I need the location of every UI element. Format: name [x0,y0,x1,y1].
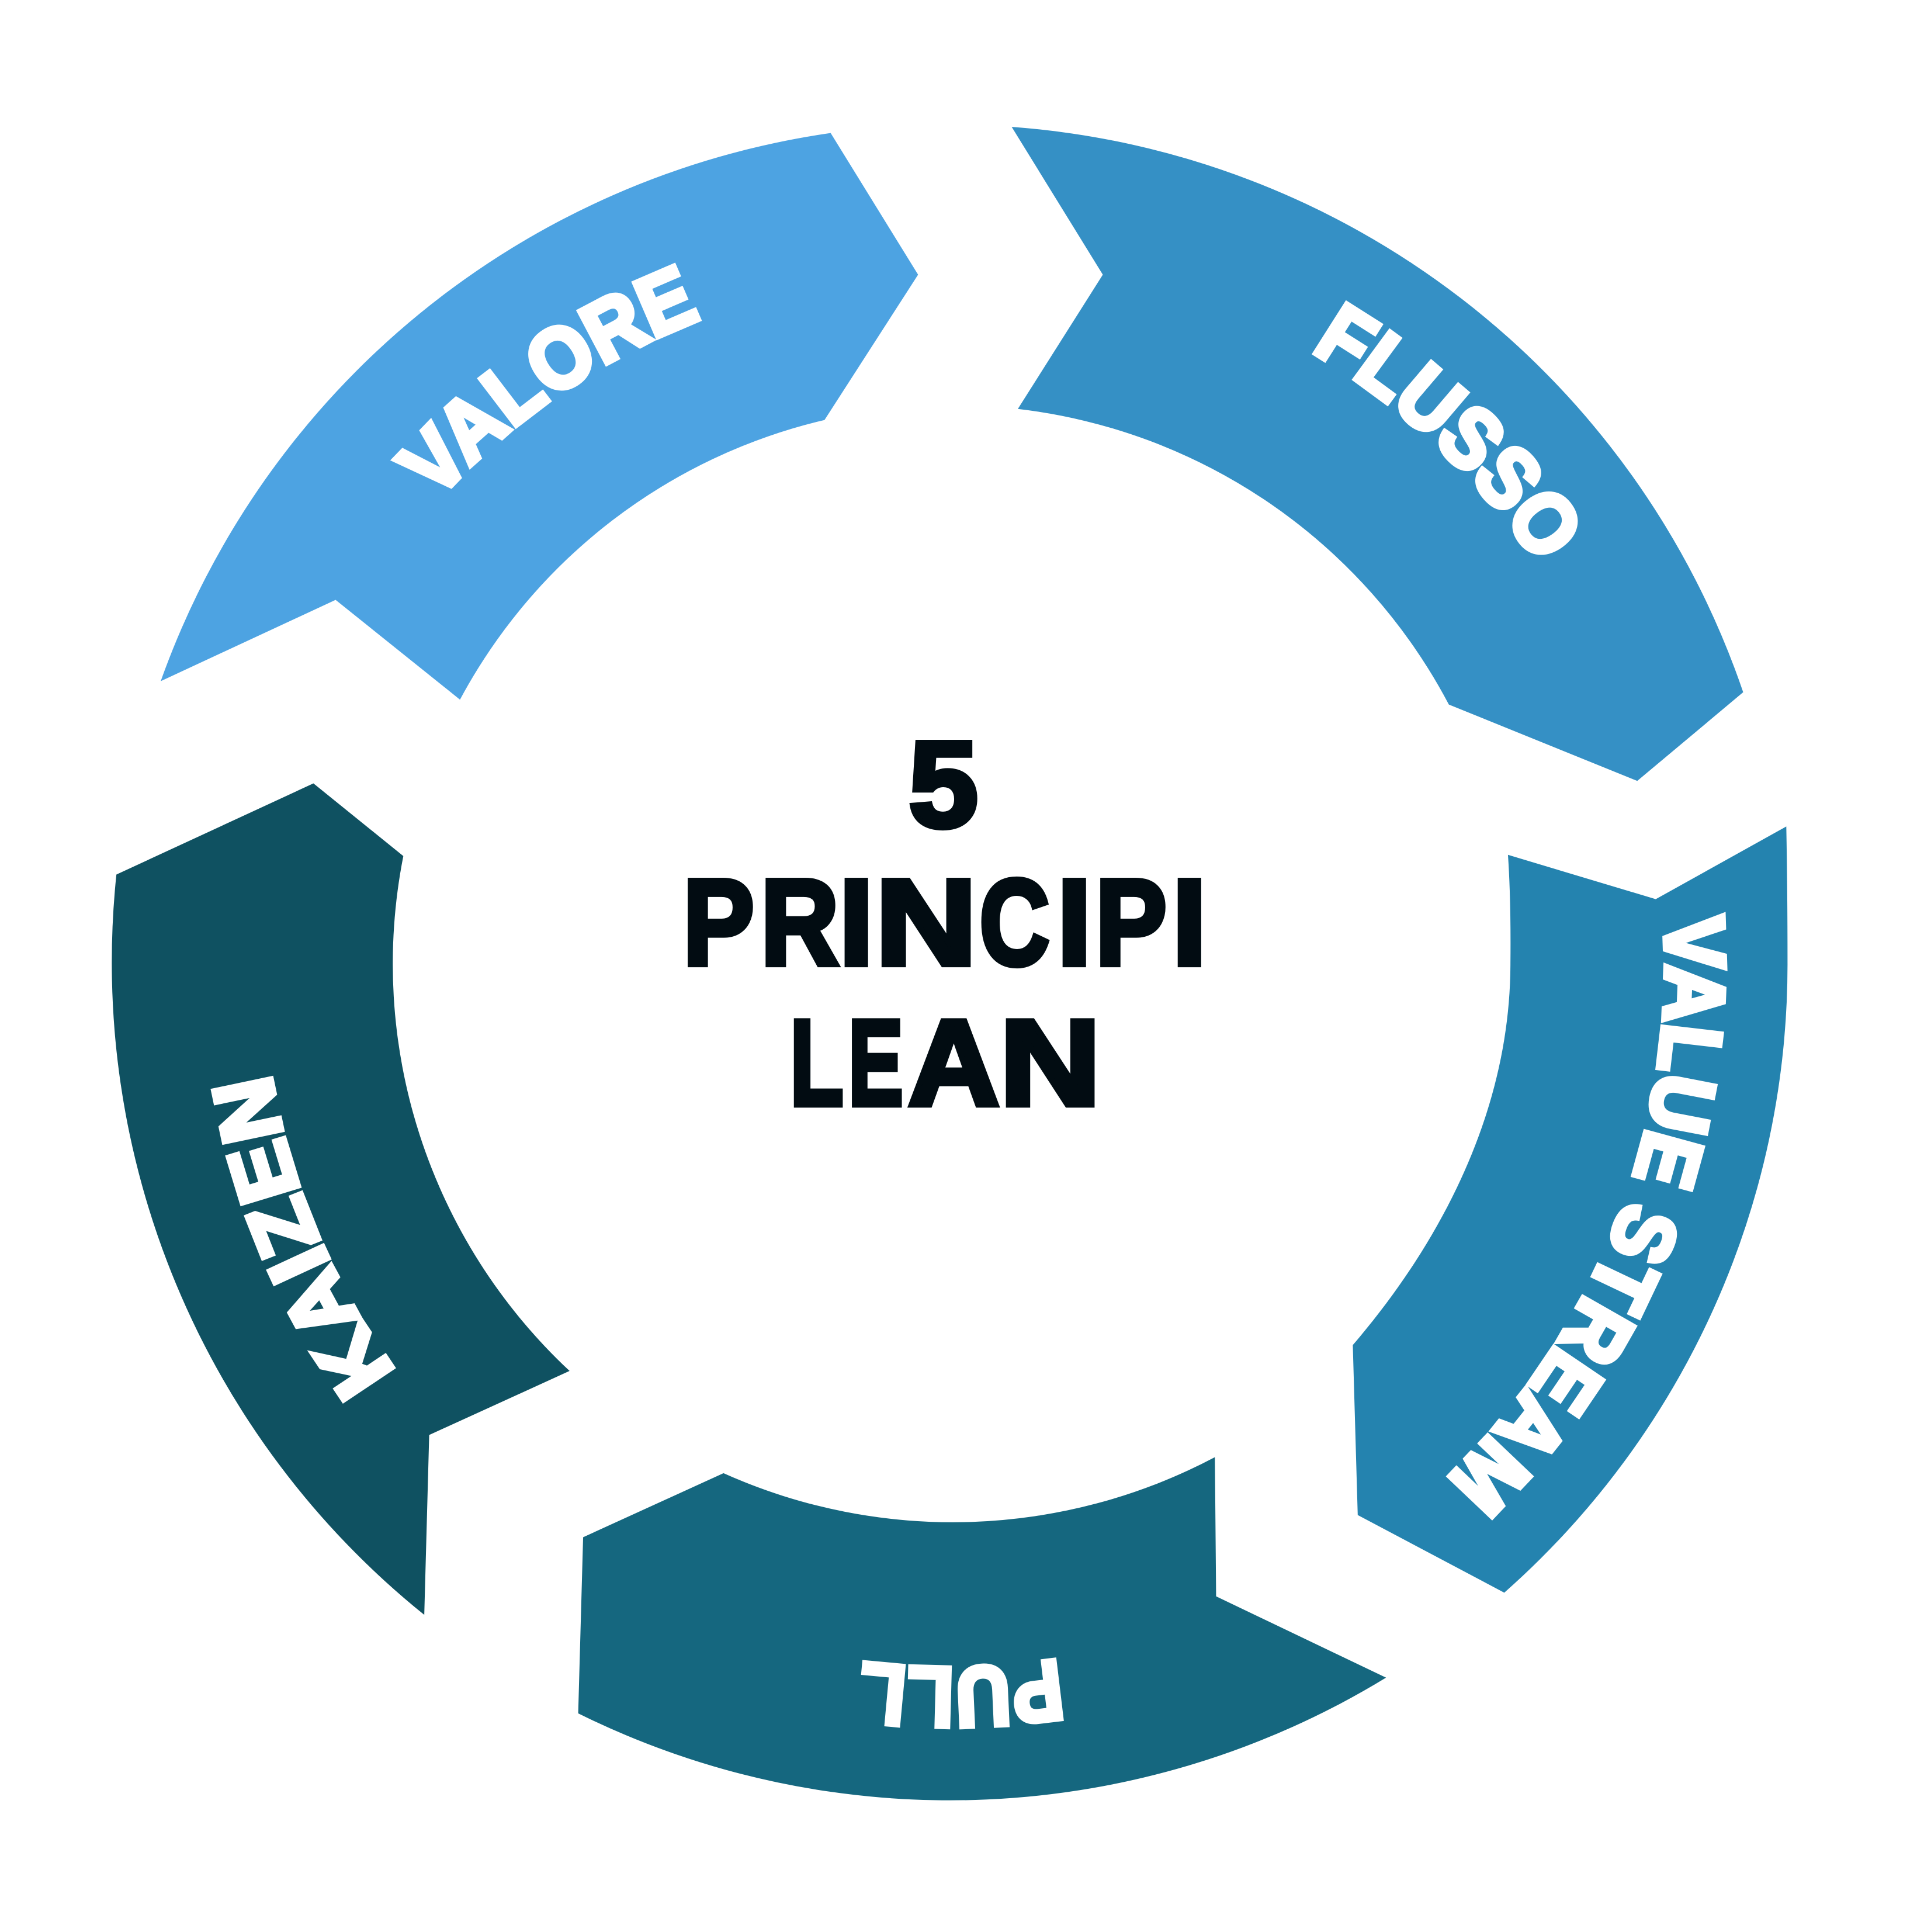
panel: value stream [1353,826,1788,1593]
title line: lean: A [908,995,999,1131]
arrow segment: flusso [1012,127,1743,781]
label: kaizen: KAIZEN [210,1075,396,1404]
title line: lean: N [1000,995,1101,1131]
title line: principi: I [1057,854,1091,991]
title line: principi: R [761,854,839,991]
label: valore: VALORE [390,262,702,489]
title line: principi: C [980,854,1049,991]
title line: principi: N [875,854,977,991]
label: flusso: FLUSSO [1312,300,1578,555]
title line: principi: I [839,854,873,991]
title line: principi: P [683,854,754,991]
panel: valore [161,133,918,700]
panel: kaizen [112,783,570,1615]
title number: 5 [909,716,978,853]
title: 5 principi lean [683,716,1207,1131]
title line: lean: L [790,995,844,1131]
panel: pull [578,1457,1386,1801]
label: pull: PULL [861,1657,1064,1730]
label: value stream: VALUE STREAM [1445,912,1728,1521]
arrow segment: valore [161,133,918,700]
arrow segment: kaizen [112,784,570,1615]
title line: lean: E [848,995,903,1131]
arrow segment: value stream [1353,826,1787,1592]
arrow segment: pull [578,1457,1386,1801]
title line: principi: I [1172,854,1207,991]
title line: principi: P [1095,854,1167,991]
panel: flusso [1012,127,1743,781]
